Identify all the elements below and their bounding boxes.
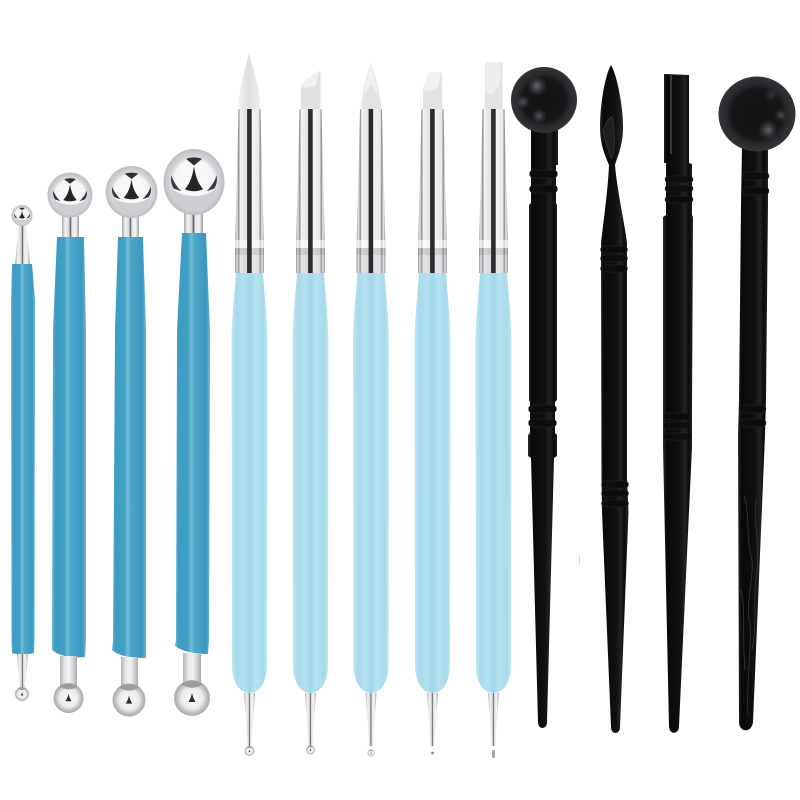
upper neck [62, 216, 79, 237]
tool: silicone spear brush [353, 62, 389, 756]
handle [476, 273, 512, 693]
tool: extra large steel ball stylus [164, 149, 224, 716]
lower neck [17, 654, 28, 692]
dotting needle [427, 693, 438, 746]
silicone tip [484, 62, 502, 109]
needle ball [306, 746, 315, 754]
ferrule [296, 109, 325, 273]
ferrule [479, 109, 508, 273]
dotting needle [305, 693, 316, 746]
silicone tip [423, 72, 442, 109]
tool: silicone pointed brush [232, 52, 268, 756]
shaft [663, 74, 693, 733]
ferrule [418, 109, 447, 273]
tool: small steel ball stylus [11, 205, 35, 701]
handle [52, 237, 86, 657]
ball highlights [758, 88, 788, 140]
needle point [431, 752, 434, 754]
upper ball [106, 166, 158, 218]
dotting needle [488, 693, 499, 746]
handle [353, 273, 389, 693]
tool: silicone chisel brush [414, 72, 450, 754]
handle [232, 273, 268, 693]
handle [11, 264, 35, 654]
upper neck [122, 216, 139, 237]
dotting needle [366, 693, 376, 746]
tool: black ball sculpting stick [511, 67, 577, 728]
upper ball [48, 172, 92, 218]
tool: silicone flat brush [476, 62, 512, 758]
tool: black leaf blade sculpting stick [600, 65, 628, 733]
tool: large steel ball stylus [106, 166, 158, 716]
dotting needle [244, 693, 255, 746]
lower ball [15, 687, 29, 701]
top slot [670, 74, 672, 154]
ball head [718, 76, 796, 152]
ball head [511, 67, 577, 133]
tool: black flat slot sculpting stick [663, 74, 693, 733]
shaft [600, 65, 628, 733]
handle [175, 233, 210, 654]
upper ball [164, 149, 224, 215]
handle [292, 273, 328, 693]
tool: silicone slanted brush [292, 71, 328, 754]
upper neck [184, 212, 203, 233]
upper neck [15, 226, 30, 264]
wood grain texture [741, 495, 758, 715]
lower neck [183, 653, 201, 683]
shaft [528, 128, 558, 728]
lower ball [54, 683, 84, 713]
lower neck [121, 657, 138, 690]
rings [664, 176, 693, 440]
ball highlights [516, 76, 547, 124]
rings [739, 172, 769, 427]
tool: large black ball sculpting stick [718, 76, 796, 730]
stray speck [579, 556, 580, 565]
ferrule [235, 109, 264, 273]
silicone tip [301, 71, 320, 109]
lower neck [60, 656, 77, 690]
tool: medium steel ball stylus [48, 172, 92, 713]
needle ball [368, 750, 374, 756]
needle point [492, 750, 495, 758]
silicone tip [239, 52, 260, 109]
blade facet [603, 117, 614, 158]
shaft [738, 148, 768, 730]
needle ball [244, 746, 254, 756]
lower ball [112, 684, 146, 716]
lower ball [174, 680, 210, 716]
rings [600, 246, 628, 507]
silicone tip [361, 62, 381, 109]
ferrule [356, 109, 386, 273]
handle [112, 237, 146, 658]
upper ball [12, 205, 32, 226]
rings [528, 170, 558, 427]
handle [414, 273, 450, 693]
